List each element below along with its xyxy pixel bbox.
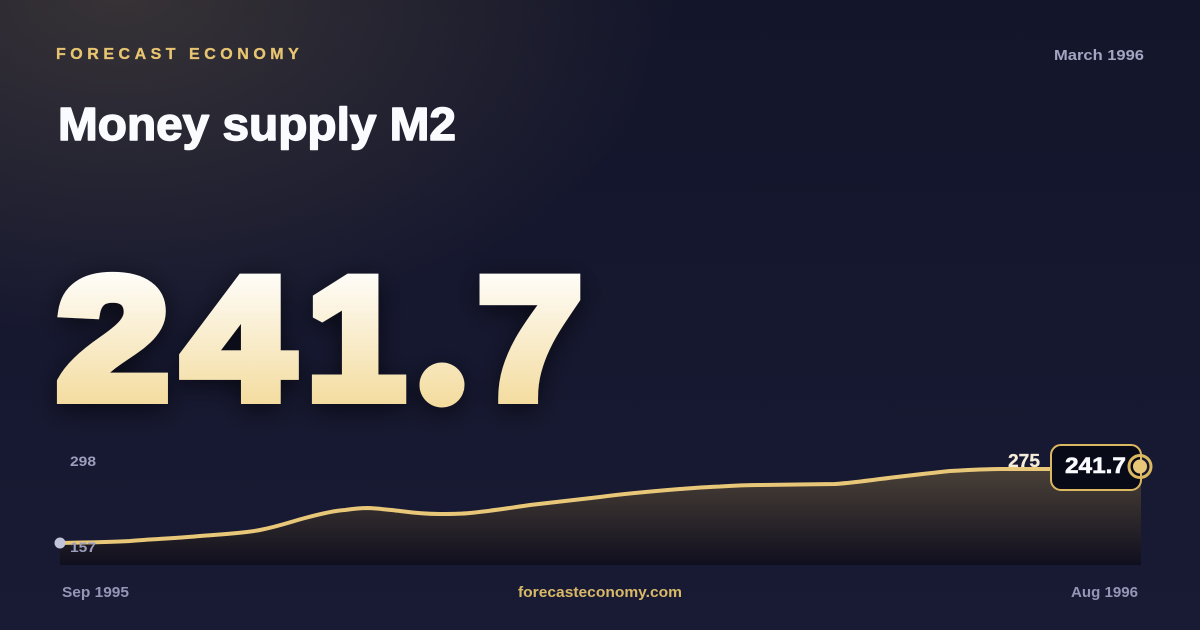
source url: forecasteconomy.com [518, 585, 682, 601]
end value callout: 241.7 [1065, 453, 1126, 478]
big value: . [416, 243, 464, 435]
axis min label: 157 [70, 539, 96, 555]
start point [54, 538, 66, 548]
start date: Sep 1995 [62, 585, 129, 601]
big value: 1 [307, 243, 405, 435]
axis max label: 298 [70, 453, 96, 469]
end value callout [1051, 445, 1141, 490]
brand label: FORECAST ECONOMY [56, 46, 303, 63]
peak label: 275 [1008, 451, 1040, 471]
sparkline chart [54, 445, 1151, 565]
area fill [60, 466, 1141, 565]
big value: 4 [183, 243, 293, 435]
end point marker [1129, 456, 1151, 478]
date label: March 1996 [1054, 47, 1144, 64]
big value: 2 [57, 243, 169, 435]
trend line [60, 469, 1050, 543]
big value: 7 [478, 243, 582, 435]
title: Money supply M2 [58, 98, 456, 150]
end date: Aug 1996 [1071, 585, 1138, 601]
big value [57, 243, 582, 435]
